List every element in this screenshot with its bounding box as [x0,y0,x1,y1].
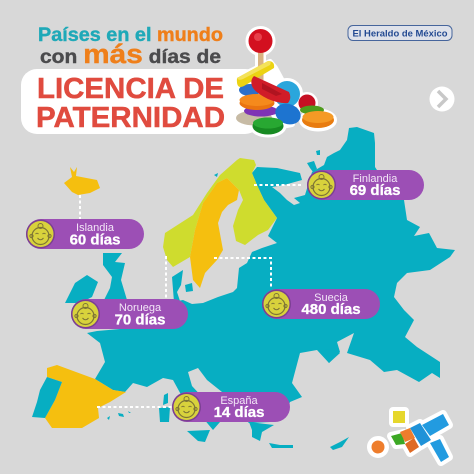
label: Noruega [71,299,188,329]
Arctic islands [214,150,320,177]
yellow ring [237,61,274,87]
Balearic Islands [107,411,131,420]
Sardinia [159,407,170,422]
icon: next arrow [430,86,454,112]
label: Islandia [26,219,144,249]
yellow block [393,411,405,423]
icon: stacking rings toy [236,29,334,134]
title: paternidad: PATERNIDAD [36,102,225,134]
Danish islands [185,283,193,292]
Norway and Finland [163,158,277,267]
blue block lower [430,439,449,462]
label: España: España [220,395,259,407]
label: Islandia: Islandia [76,222,115,234]
title panel [21,69,261,134]
United Kingdom [103,253,127,302]
orange ring [240,96,274,110]
badge: El Heraldo de México [348,26,452,40]
Denmark [172,270,183,302]
Sicily [187,430,210,442]
label: Islandia: 60 días [70,232,120,248]
label: Finlandia [307,170,424,200]
toy white outline [237,29,334,134]
blue block upper [422,414,449,436]
purple ring [244,106,278,116]
title: licencia de: LICENCIA DE [37,73,224,105]
label: Suecia [262,289,380,319]
Corsica [163,393,168,405]
title line 1: Países en el mundo [38,25,223,46]
connector: España [97,406,172,408]
blue ring front [272,100,304,128]
grey ring [236,110,272,126]
red ring [251,76,290,103]
label: Suecia: Suecia [314,292,349,304]
blue ring back [239,84,261,96]
blue ball back [274,81,300,107]
green ring front [252,118,284,134]
Ireland [65,275,98,303]
title line 2: con más días de [40,39,221,69]
Cyprus [330,437,349,450]
label: Noruega: Noruega [119,302,162,314]
Portugal [32,377,62,418]
small red ball [298,94,316,112]
green ring back [300,106,324,114]
orange ball [372,440,384,454]
green block [391,433,405,445]
Spain [45,365,126,428]
label: Finlandia: 69 días [350,182,400,199]
connector: Finlandia [254,184,302,186]
blue block center [410,423,431,446]
connector: Islandia [79,195,81,219]
Sweden [190,178,239,288]
orange ring front [302,112,334,128]
Crete [269,443,293,448]
toy peg [258,50,264,80]
label: Finlandia: Finlandia [353,173,398,185]
Iceland [64,167,100,195]
Crimea [320,349,340,363]
icon: building blocks [371,411,449,462]
label: España: 14 días [214,404,264,421]
connector: Noruega [165,256,167,300]
connector: Suecia [214,258,271,289]
blocks white outline [371,411,449,462]
continental Europe [87,127,455,430]
label: Suecia: 480 días [301,301,361,318]
badge: El Heraldo de México: El Heraldo de México [352,28,448,40]
label: España [172,392,290,422]
orange blocks [400,428,415,442]
map of Europe [32,127,455,450]
Greece [249,422,274,441]
red ball [248,29,272,53]
label: Noruega: 70 días [115,312,165,328]
